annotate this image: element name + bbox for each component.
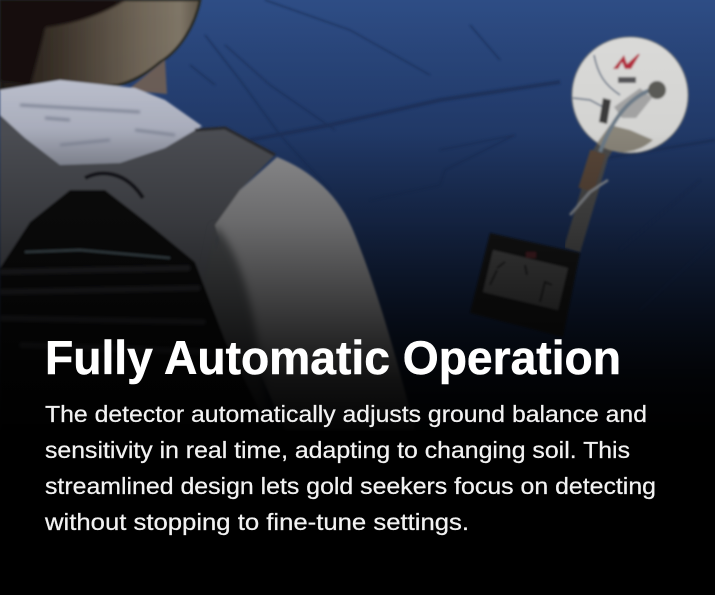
collar folds <box>20 105 175 145</box>
backpack folds <box>0 268 210 352</box>
neck <box>130 60 167 94</box>
coil shadow crack <box>573 55 620 108</box>
hoodie collar <box>0 80 202 165</box>
body text: The detector automatically adjusts ground balance and <box>45 401 647 427</box>
control box screen <box>483 250 568 310</box>
body text <box>44 401 656 535</box>
body text: streamlined design lets gold seekers focus on detecting <box>45 473 656 499</box>
hat crown and brim <box>0 0 200 90</box>
vest edge <box>195 128 275 155</box>
sleeve folds <box>200 225 268 430</box>
coil bracket <box>599 98 611 124</box>
detector shaft <box>570 125 618 250</box>
coil connector knob <box>648 81 666 99</box>
backpack body <box>0 190 275 440</box>
backpack zipper <box>25 250 170 258</box>
body text: sensitivity in real time, adapting to changing soil. This <box>45 437 630 463</box>
photo background: blue ground <box>0 0 715 430</box>
backpack strap loop <box>85 173 143 198</box>
ground texture cracks <box>190 0 715 310</box>
sleeve <box>215 157 415 430</box>
body text: without stopping to fine-tune settings. <box>44 509 469 535</box>
dark gradient overlay <box>0 0 715 445</box>
detector search coil <box>572 37 688 153</box>
coil logo <box>613 54 640 69</box>
coil notch <box>597 125 653 152</box>
coil model mark <box>618 77 636 83</box>
hat band and hair <box>0 0 125 85</box>
coil cable <box>600 90 650 152</box>
title: Fully Automatic Operation <box>45 331 621 384</box>
detector control box <box>470 233 580 337</box>
screen readout <box>490 262 552 302</box>
photo: hiker with hat and backpack <box>0 0 415 440</box>
red indicator <box>526 252 536 258</box>
vest <box>0 115 275 330</box>
